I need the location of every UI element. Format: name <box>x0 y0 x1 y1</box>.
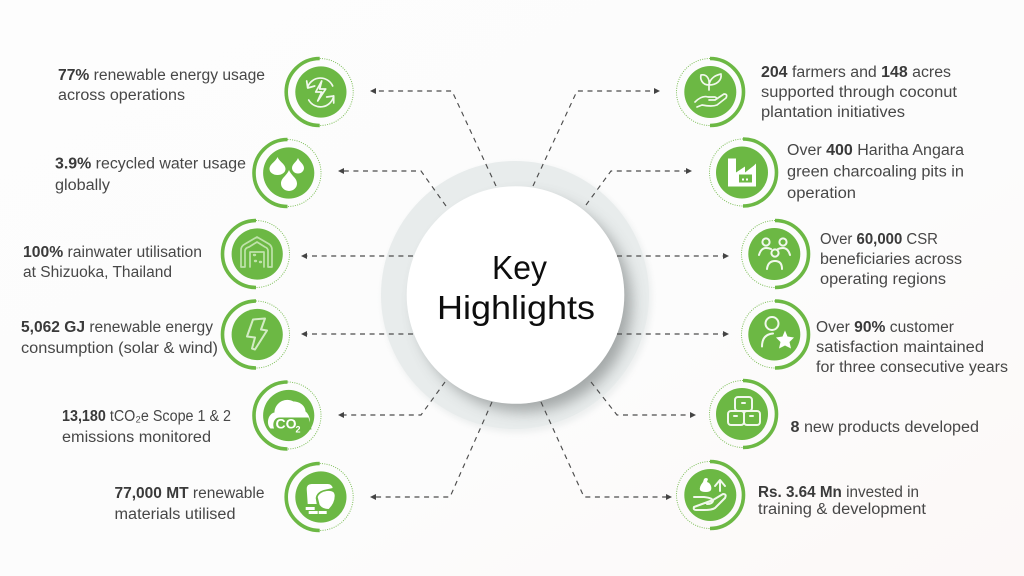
text: 60,000 CSR <box>820 231 962 288</box>
text: 204 farmers <box>761 64 958 121</box>
text: Rs. 3.64 Mn <box>758 484 927 518</box>
text: 100% rainwater <box>23 244 202 281</box>
text: 400 Haritha Angara <box>787 142 964 202</box>
connector: charcoaling pits <box>586 168 692 205</box>
text: 8 new products: 8 new products developed <box>790 419 979 436</box>
icon: product boxes <box>710 380 776 448</box>
text: 204 farmers: supported through coconut <box>761 84 958 101</box>
icon: factory <box>710 139 776 206</box>
text: 77% renewable energy <box>58 67 265 104</box>
text: 77,000 MT <box>114 485 264 523</box>
text: 100% rainwater: 100% rainwater utilisation <box>23 244 202 261</box>
text: 77% renewable energy: across operations <box>58 87 185 104</box>
icon: CO2 cloud <box>254 382 321 449</box>
connector: materials <box>370 402 492 500</box>
text: Rs. 3.64 Mn: Rs. 3.64 Mn invested in <box>758 484 919 501</box>
text: 90% customer satisfaction: for three consecutive years <box>816 359 1008 376</box>
connector: CSR beneficiaries <box>617 253 729 259</box>
hub shadow <box>416 196 632 412</box>
text: 204 farmers: 204 farmers and 148 acres <box>761 64 951 81</box>
central hub <box>381 161 652 433</box>
icon: people <box>742 220 808 288</box>
text: 400 Haritha Angara: green charcoaling pits in <box>787 164 964 180</box>
icon: hand with bag and arrow <box>676 462 744 528</box>
title <box>437 249 595 326</box>
text: 60,000 CSR: operating regions <box>820 271 946 288</box>
icon: CO2 cloud: CO <box>276 416 297 432</box>
connector: emissions <box>338 382 445 418</box>
outer grey ring <box>381 161 652 433</box>
icon: renewable energy cycle <box>286 58 353 126</box>
text: 400 Haritha Angara: operation <box>787 185 856 202</box>
title: Highlights <box>437 289 595 326</box>
text: 90% customer satisfaction: Over 90% customer <box>816 319 954 336</box>
text: 77% renewable energy: 77% renewable energy usage <box>58 67 265 84</box>
icon: warehouse <box>222 220 290 288</box>
connector: recycled water <box>338 168 446 206</box>
text: Rs. 3.64 Mn: training & development <box>758 501 927 518</box>
text: 77,000 MT: materials utilised <box>114 506 236 523</box>
text: 5,062 GJ: consumption (solar & wind) <box>21 340 218 357</box>
icon: lightning bolt <box>222 301 290 368</box>
connector: training <box>541 402 672 500</box>
connector: new products <box>591 382 696 418</box>
connector: rainwater <box>301 253 413 259</box>
text: 204 farmers: plantation initiatives <box>761 104 905 121</box>
text: 3.9% recycled water: 3.9% recycled water usage <box>55 156 246 172</box>
text: 90% customer satisfaction <box>816 319 1008 376</box>
text: 3.9% recycled water: globally <box>55 177 110 194</box>
icon: CO2 cloud: 2 <box>296 424 301 434</box>
text: 13,180 tCO2e: emissions monitored <box>62 429 211 446</box>
text: 90% customer satisfaction: satisfaction maintained <box>816 339 984 356</box>
text: 13,180 tCO2e: 13,180 tCO₂e Scope 1 & 2 <box>62 408 231 425</box>
text: 5,062 GJ <box>21 319 218 357</box>
text: 100% rainwater: at Shizuoka, Thailand <box>23 264 172 281</box>
title: Key <box>492 249 547 286</box>
text: 77,000 MT: 77,000 MT renewable <box>114 485 264 502</box>
connector: 5,062 GJ <box>301 331 413 337</box>
connector: customer satisfaction <box>617 331 729 337</box>
text: 5,062 GJ: 5,062 GJ renewable energy <box>21 319 213 336</box>
icon: customer with star <box>742 301 808 368</box>
icon: water drops <box>254 140 321 206</box>
text: 3.9% recycled water <box>55 156 246 194</box>
text: 60,000 CSR: Over 60,000 CSR <box>820 231 938 248</box>
text: 13,180 tCO2e <box>62 408 231 446</box>
icon: renewable materials <box>286 464 353 530</box>
text: 60,000 CSR: beneficiaries across <box>820 251 962 268</box>
connector: 77% renewable energy <box>370 88 496 186</box>
connector: farmers <box>533 88 660 186</box>
text: 400 Haritha Angara: Over 400 Haritha Angara <box>787 142 964 159</box>
white hub circle <box>407 186 624 404</box>
icon: plant in hand <box>676 58 744 126</box>
